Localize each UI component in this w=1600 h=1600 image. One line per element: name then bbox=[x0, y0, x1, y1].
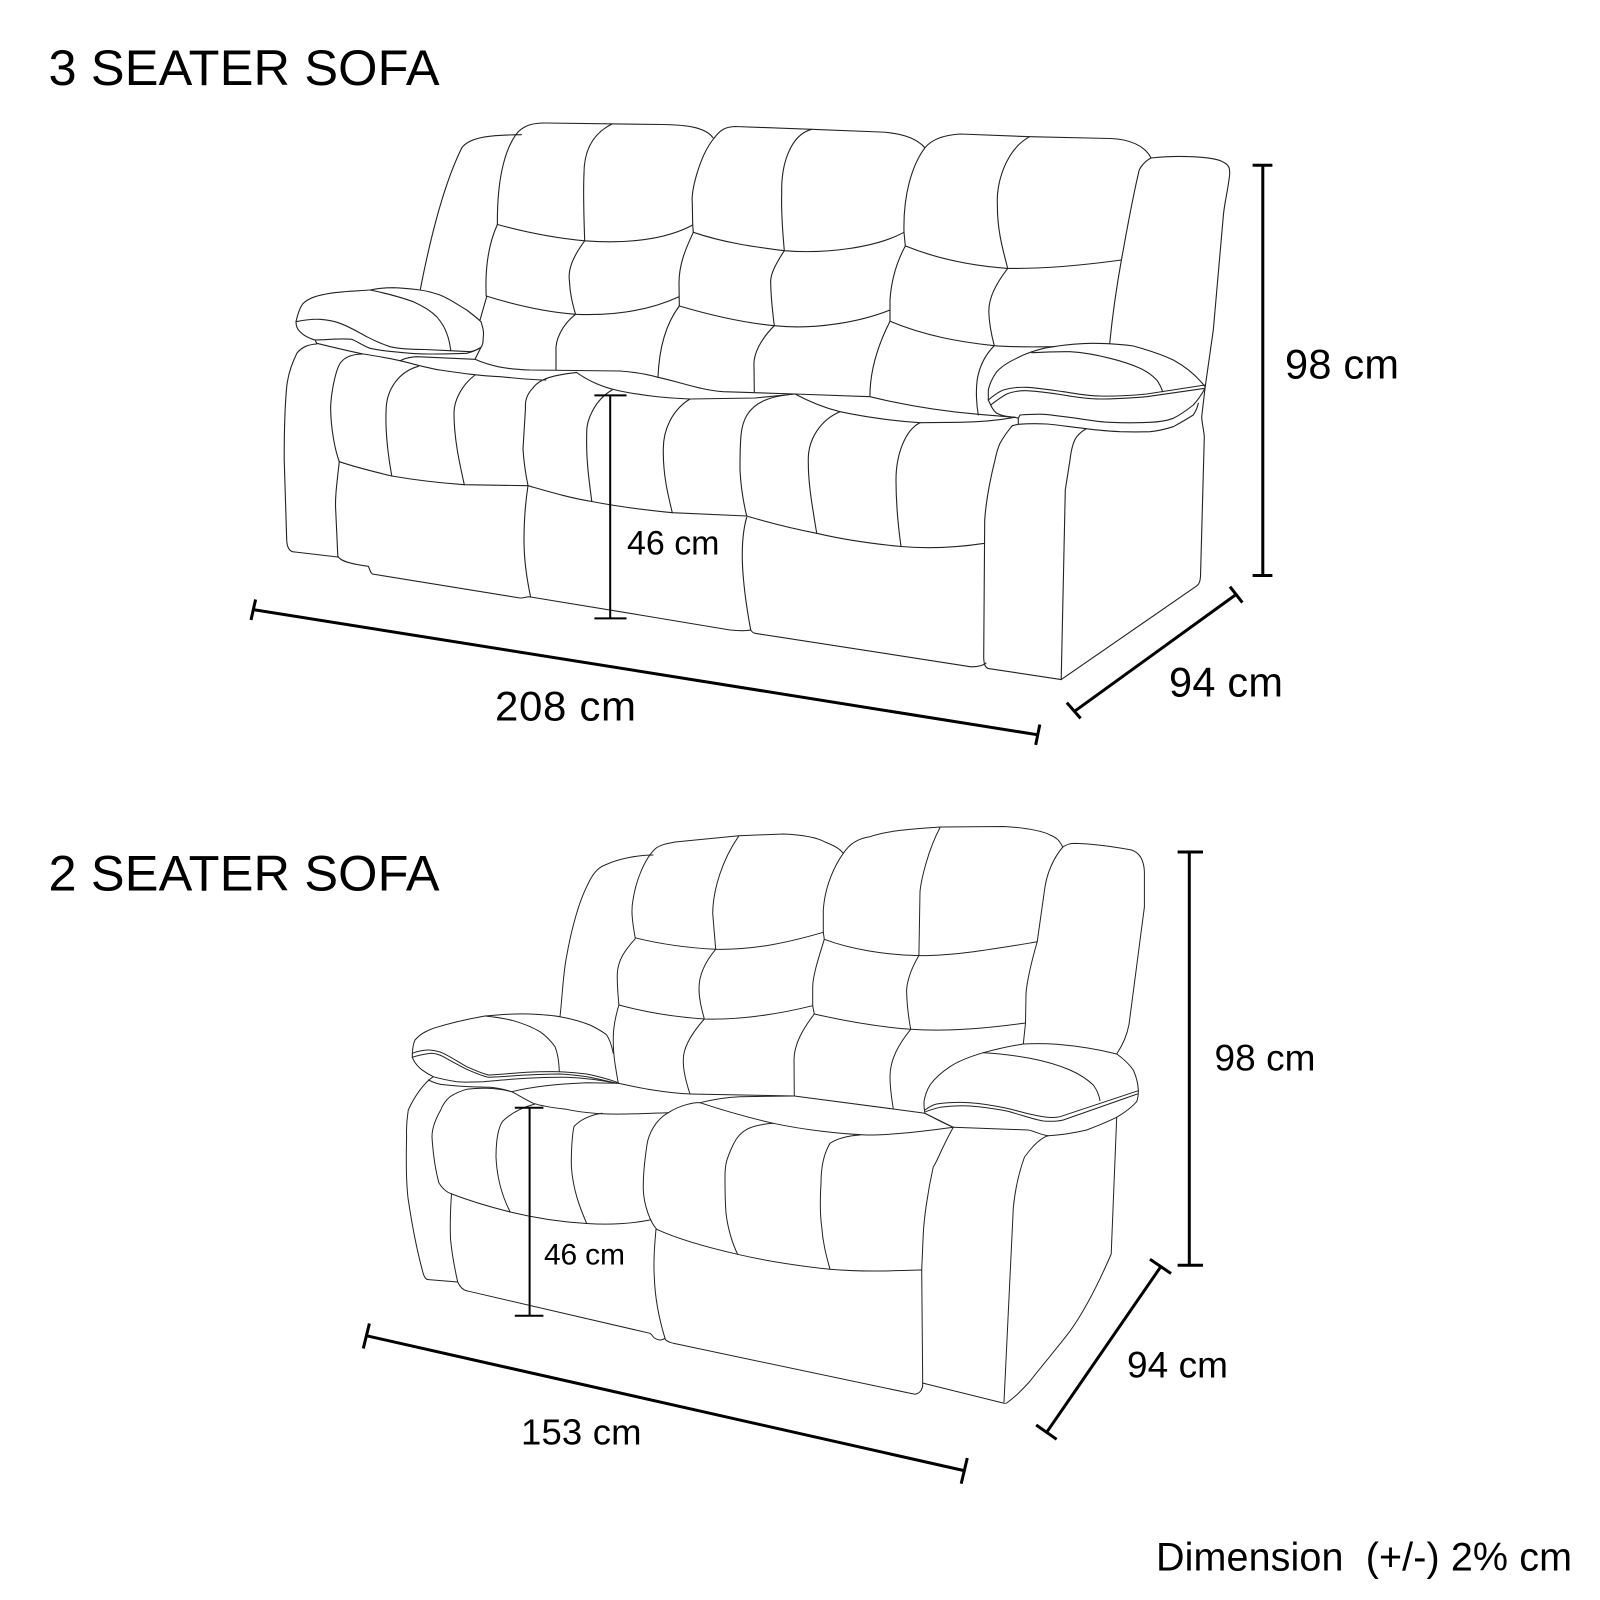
illustration: 2 seater sofa bbox=[406, 826, 1144, 1403]
right arm side bbox=[922, 1117, 1117, 1403]
left arm front bbox=[406, 1077, 458, 1282]
dimension: 2 seater seat height 46 cm bbox=[515, 1108, 543, 1316]
back cushions bbox=[420, 123, 1151, 417]
label: 46 cm: 46 cm bbox=[627, 524, 720, 562]
label: 94 cm: 94 cm bbox=[1169, 658, 1283, 706]
right back wing bbox=[1110, 156, 1230, 388]
left arm front bbox=[284, 344, 338, 557]
left armrest bbox=[296, 288, 484, 354]
right armrest bbox=[988, 343, 1205, 432]
dimension: 3 seater depth 94 cm bbox=[1067, 587, 1242, 718]
right back wing bbox=[1023, 843, 1144, 1054]
dimension: 3 seater width 208 cm bbox=[251, 600, 1040, 745]
label: 98 cm: 98 cm bbox=[1214, 1038, 1316, 1078]
note: dimension tolerance: Dimension (+/-) 2% cm bbox=[1156, 1536, 1572, 1580]
seat cushions bbox=[428, 1080, 953, 1271]
title: 3 seater sofa: 3 SEATER SOFA bbox=[48, 39, 440, 96]
dimension: 2 seater width 153 cm bbox=[363, 1324, 967, 1484]
dimension: 3 seater height 98 cm bbox=[1253, 165, 1272, 576]
right armrest bbox=[924, 1044, 1138, 1136]
back cushions bbox=[560, 826, 1063, 1127]
left armrest bbox=[412, 1014, 618, 1083]
lower front panels bbox=[450, 1127, 953, 1394]
label: 94 cm: 94 cm bbox=[1127, 1344, 1228, 1386]
dimension: 2 seater height 98 cm bbox=[1178, 852, 1203, 1265]
lower front panels bbox=[335, 462, 986, 667]
dimension: 2 seater depth 94 cm bbox=[1036, 1259, 1171, 1439]
label: 46 cm: 46 cm bbox=[544, 1238, 625, 1272]
title: 2 seater sofa: 2 SEATER SOFA bbox=[48, 844, 440, 902]
seat cushions bbox=[317, 343, 1015, 548]
label: 208 cm: 208 cm bbox=[495, 682, 636, 730]
dimension: 3 seater seat height 46 cm bbox=[594, 395, 626, 618]
label: 153 cm: 153 cm bbox=[521, 1412, 642, 1452]
illustration: 3 seater sofa bbox=[284, 123, 1230, 680]
label: 98 cm: 98 cm bbox=[1285, 340, 1399, 388]
right arm side and front bbox=[984, 388, 1205, 680]
